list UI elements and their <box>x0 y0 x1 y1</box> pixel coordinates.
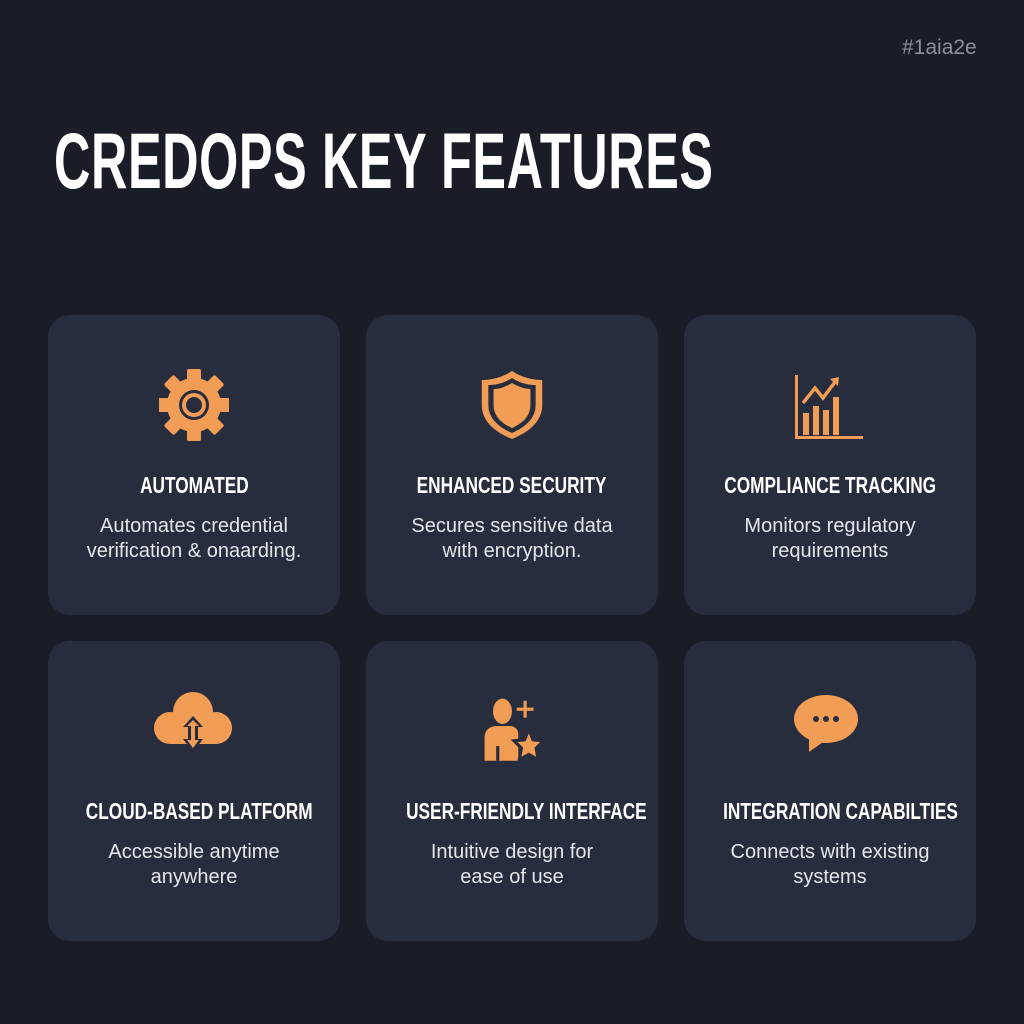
heading: INTEGRATION CAPABILTIES <box>723 798 958 824</box>
description: anywhere <box>151 866 237 888</box>
panel: security <box>366 315 658 615</box>
description <box>744 515 916 562</box>
panel: integration <box>684 641 976 941</box>
title: CREDOPS KEY FEATURES <box>54 116 714 205</box>
icon: shield <box>482 371 542 439</box>
description <box>411 515 613 562</box>
description <box>86 515 301 562</box>
description: with encryption. <box>443 540 581 562</box>
description: requirements <box>772 540 888 562</box>
icon: gear <box>159 369 229 441</box>
description: Intuitive design for <box>431 841 593 863</box>
description: Secures sensitive data <box>411 515 613 537</box>
heading: USER-FRIENDLY INTERFACE <box>406 798 647 824</box>
panel: cloud <box>48 641 340 941</box>
panel: automated <box>48 315 340 615</box>
heading: COMPLIANCE TRACKING <box>724 472 936 498</box>
panel: user-friendly <box>366 641 658 941</box>
description <box>431 841 593 888</box>
description: ease of use <box>460 866 564 888</box>
panel: compliance <box>684 315 976 615</box>
heading: ENHANCED SECURITY <box>417 472 607 498</box>
description: Monitors regulatory <box>744 515 916 537</box>
description <box>108 841 280 888</box>
icon: cloud <box>154 692 232 748</box>
description: verification & onaarding. <box>87 540 301 562</box>
description: Accessible anytime <box>108 841 280 863</box>
description <box>730 841 929 888</box>
description: Automates credential <box>100 515 288 537</box>
heading: AUTOMATED <box>140 472 248 498</box>
heading: CLOUD-BASED PLATFORM <box>86 798 313 824</box>
description: systems <box>793 866 867 888</box>
icon: chart <box>795 375 863 439</box>
hash label: #1aia2e <box>902 36 977 59</box>
icon: user star <box>484 698 540 761</box>
icon: chat bubble <box>794 695 858 752</box>
description: Connects with existing <box>730 841 929 863</box>
